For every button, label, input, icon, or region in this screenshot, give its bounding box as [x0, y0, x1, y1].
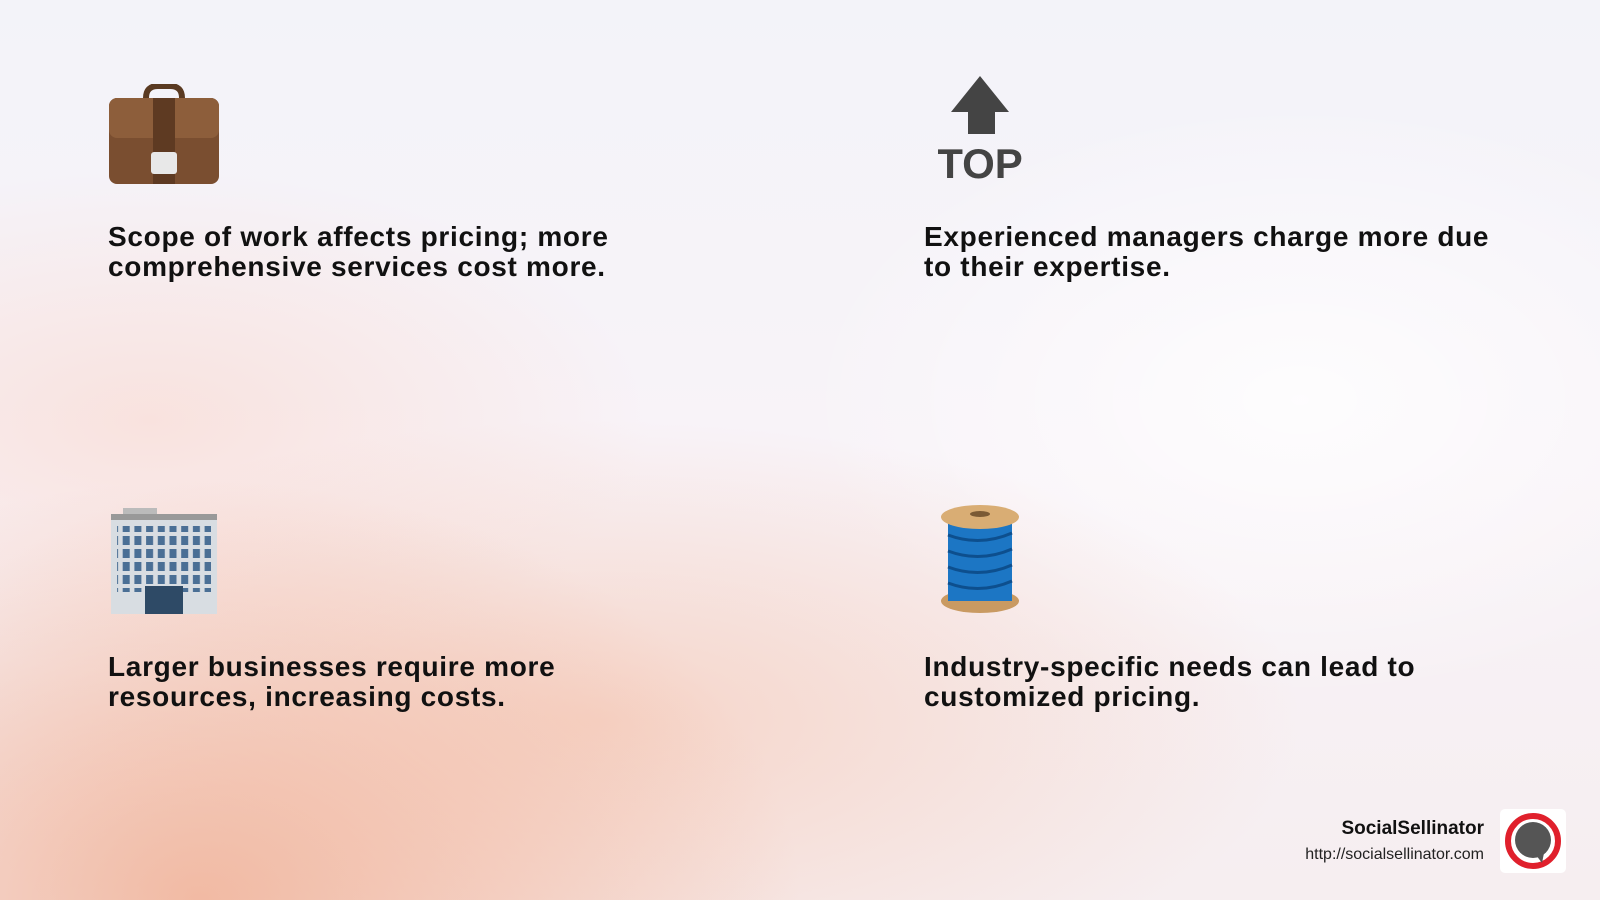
text: experienced managers	[924, 221, 1489, 282]
text: experienced managers: to their expertise.	[924, 251, 1171, 282]
text: larger businesses: Larger businesses require more	[108, 651, 555, 682]
text: industry-specific: Industry-specific needs can lead to	[924, 651, 1415, 682]
text: industry-specific: customized pricing.	[924, 681, 1200, 712]
text: larger businesses: resources, increasing costs.	[108, 681, 506, 712]
icon: TOP arrow	[938, 76, 1023, 182]
text: scope of work: comprehensive services cost more.	[108, 251, 606, 282]
logo	[1500, 809, 1566, 873]
icon: thread spool	[941, 505, 1019, 613]
text: scope of work: Scope of work affects pricing; more	[108, 221, 609, 252]
icon: briefcase	[109, 84, 219, 184]
text: experienced managers: Experienced managers charge more due	[924, 221, 1489, 252]
text: industry-specific	[924, 651, 1415, 712]
text: scope of work	[108, 221, 609, 282]
brand block	[1305, 818, 1484, 863]
brand block: SocialSellinator	[1341, 818, 1484, 839]
text: larger businesses	[108, 651, 555, 712]
brand block: http://socialsellinator.com	[1305, 846, 1484, 863]
icon: office building	[111, 508, 217, 614]
